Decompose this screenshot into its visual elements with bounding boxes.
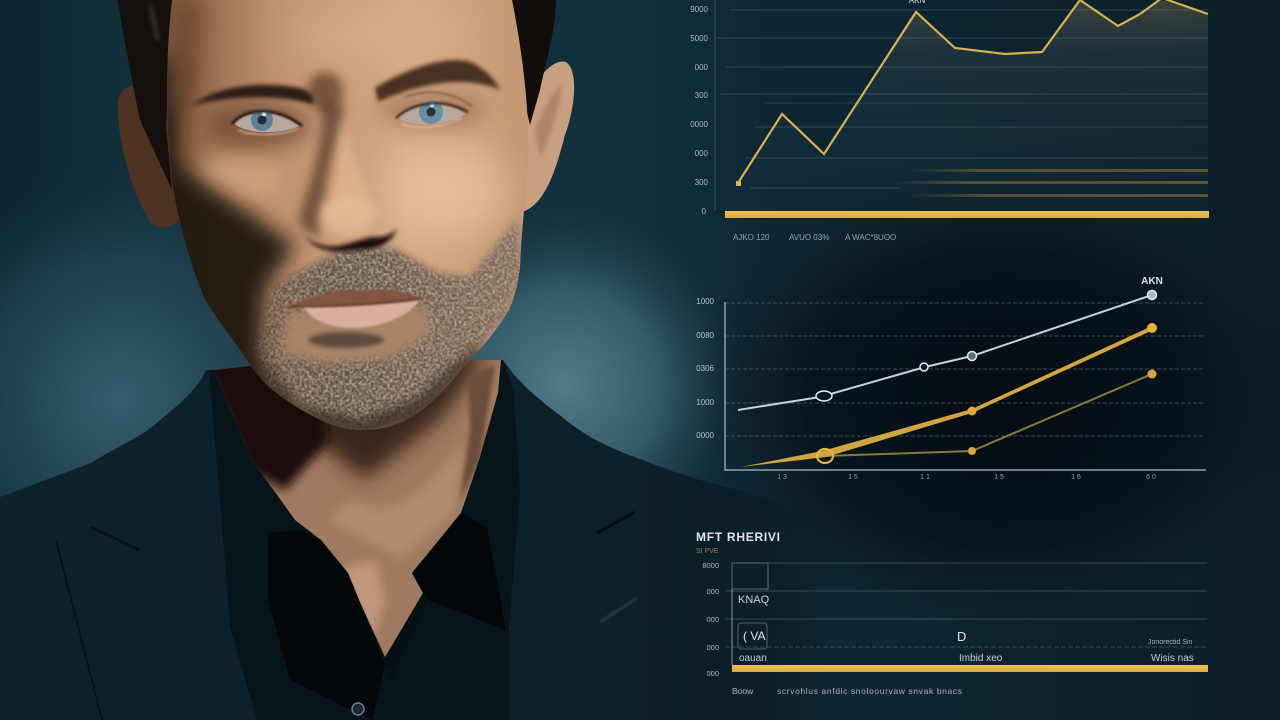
- temple shadow: [168, 0, 205, 120]
- chart 2 axes: [725, 302, 1206, 470]
- chart 1: gold area line chart: [690, 0, 1209, 242]
- eyebrow left: [192, 85, 314, 105]
- chart 3 label two: Imbid xeo: [959, 653, 1003, 664]
- chart 3 y labels: 8000: [702, 561, 719, 570]
- chart 1 y labels: 000: [695, 63, 709, 72]
- gold series: [741, 323, 1157, 467]
- chart 3 label three: Wisis nas: [1151, 653, 1194, 664]
- chart 1 x labels: A WAC*8UOO: [845, 233, 896, 242]
- chart 3 small box: [738, 623, 767, 649]
- beard dark lower edge: [262, 345, 490, 440]
- chart 2 x labels: 6 0: [1146, 474, 1156, 481]
- face shadow left: [167, 49, 307, 404]
- chart 3 y labels: 000: [706, 669, 719, 678]
- chart 3 box value: ( VA: [743, 629, 765, 643]
- chart 1 area fill: [738, 0, 1208, 211]
- chart 3 gold base bar: [732, 665, 1208, 672]
- chart 1 line: [738, 0, 1208, 183]
- chart 2 x labels: 1 6: [1071, 474, 1081, 481]
- neck: [214, 360, 501, 657]
- jacket: [0, 360, 840, 720]
- lips: [287, 289, 424, 328]
- chart 3 footnote: scrvohlus anfdic snoloourvaw snvak bnacs: [777, 686, 962, 696]
- chart 3 title: MFT RHERIVI: [696, 530, 780, 544]
- series label: AKN: [1141, 276, 1163, 287]
- chart 3 footer label: Boow: [732, 686, 754, 696]
- chart 1 x labels: [733, 233, 896, 242]
- eye right: [396, 92, 472, 127]
- chart 3 label one: oauan: [739, 653, 767, 664]
- shirt: [209, 360, 520, 720]
- chart 1 y labels: 0: [702, 207, 707, 216]
- cheek highlight right: [383, 140, 507, 240]
- chart 2 x labels: [777, 474, 1156, 481]
- chart 1 y labels: 000: [695, 149, 709, 158]
- chart 1 y labels: 9000: [690, 5, 709, 14]
- face: [167, 0, 528, 430]
- brow centre shadow: [307, 72, 343, 112]
- chart 3 y labels: 000: [706, 615, 719, 624]
- chart 1 y labels: [690, 5, 709, 216]
- chart 2 x labels: 1 3: [777, 474, 787, 481]
- chart 3 marker D: D: [957, 629, 966, 644]
- chart 1 y labels: 300: [695, 178, 709, 187]
- beard: [258, 220, 522, 432]
- chart 1 y labels: 300: [695, 91, 709, 100]
- forehead highlight: [296, 14, 376, 56]
- nose: [298, 105, 397, 252]
- chart 3: bottom panel: [696, 530, 1208, 696]
- soul patch: [308, 332, 384, 348]
- chart 3 note: Jonorectid Sin: [1148, 639, 1192, 646]
- chart 2 y labels: 0080: [696, 331, 715, 340]
- chart 3 box label: KNAQ: [738, 594, 770, 606]
- chart 1 x labels: AJKO 120: [733, 233, 770, 242]
- chart 2 y labels: 0306: [696, 364, 715, 373]
- skin under lip: [282, 305, 432, 363]
- chart 3 y axis: [731, 563, 733, 665]
- ear left: [118, 84, 182, 228]
- chart 3 y labels: 000: [706, 643, 719, 652]
- chart 1 x labels: AVUO 03%: [789, 233, 829, 242]
- chart 3 y labels: 000: [706, 587, 719, 596]
- cheek highlight left: [196, 152, 280, 204]
- chart 3 y labels: [702, 561, 719, 678]
- chart 2 x labels: 1 5: [994, 474, 1004, 481]
- shirt collar: [268, 513, 506, 720]
- chart 2 x labels: 1 5: [848, 474, 858, 481]
- chart 3 subtitle: SI PVE: [696, 548, 719, 555]
- ear right: [518, 62, 574, 212]
- eye socket right: [380, 92, 484, 128]
- chart 2 y labels: 1000: [696, 398, 715, 407]
- hair: [118, 0, 556, 190]
- chart 1 start marker: [736, 181, 741, 186]
- chart 2 x labels: 1 1: [920, 474, 930, 481]
- eyebrow right: [375, 60, 500, 102]
- chart 2 y labels: 0000: [696, 431, 715, 440]
- white series: [738, 290, 1156, 410]
- chart 2 y labels: [696, 297, 715, 440]
- ear right shadow: [535, 85, 562, 160]
- chart 1 y labels: 5000: [690, 34, 709, 43]
- eye left: [232, 109, 302, 134]
- chart 2 y labels: 1000: [696, 297, 715, 306]
- shirt button: [352, 703, 364, 715]
- chart 1 y labels: 0000: [690, 120, 709, 129]
- chart 1 y axis: [714, 0, 716, 210]
- chart 2: three series line chart: [696, 276, 1206, 481]
- olive series: [825, 370, 1156, 456]
- chart 1 gold base bar: [725, 211, 1209, 218]
- chart 1 gold glow rows: [890, 169, 1208, 197]
- chart 3 outlined box: [732, 563, 768, 589]
- eye socket left: [206, 101, 310, 149]
- portrait of man: [0, 0, 840, 720]
